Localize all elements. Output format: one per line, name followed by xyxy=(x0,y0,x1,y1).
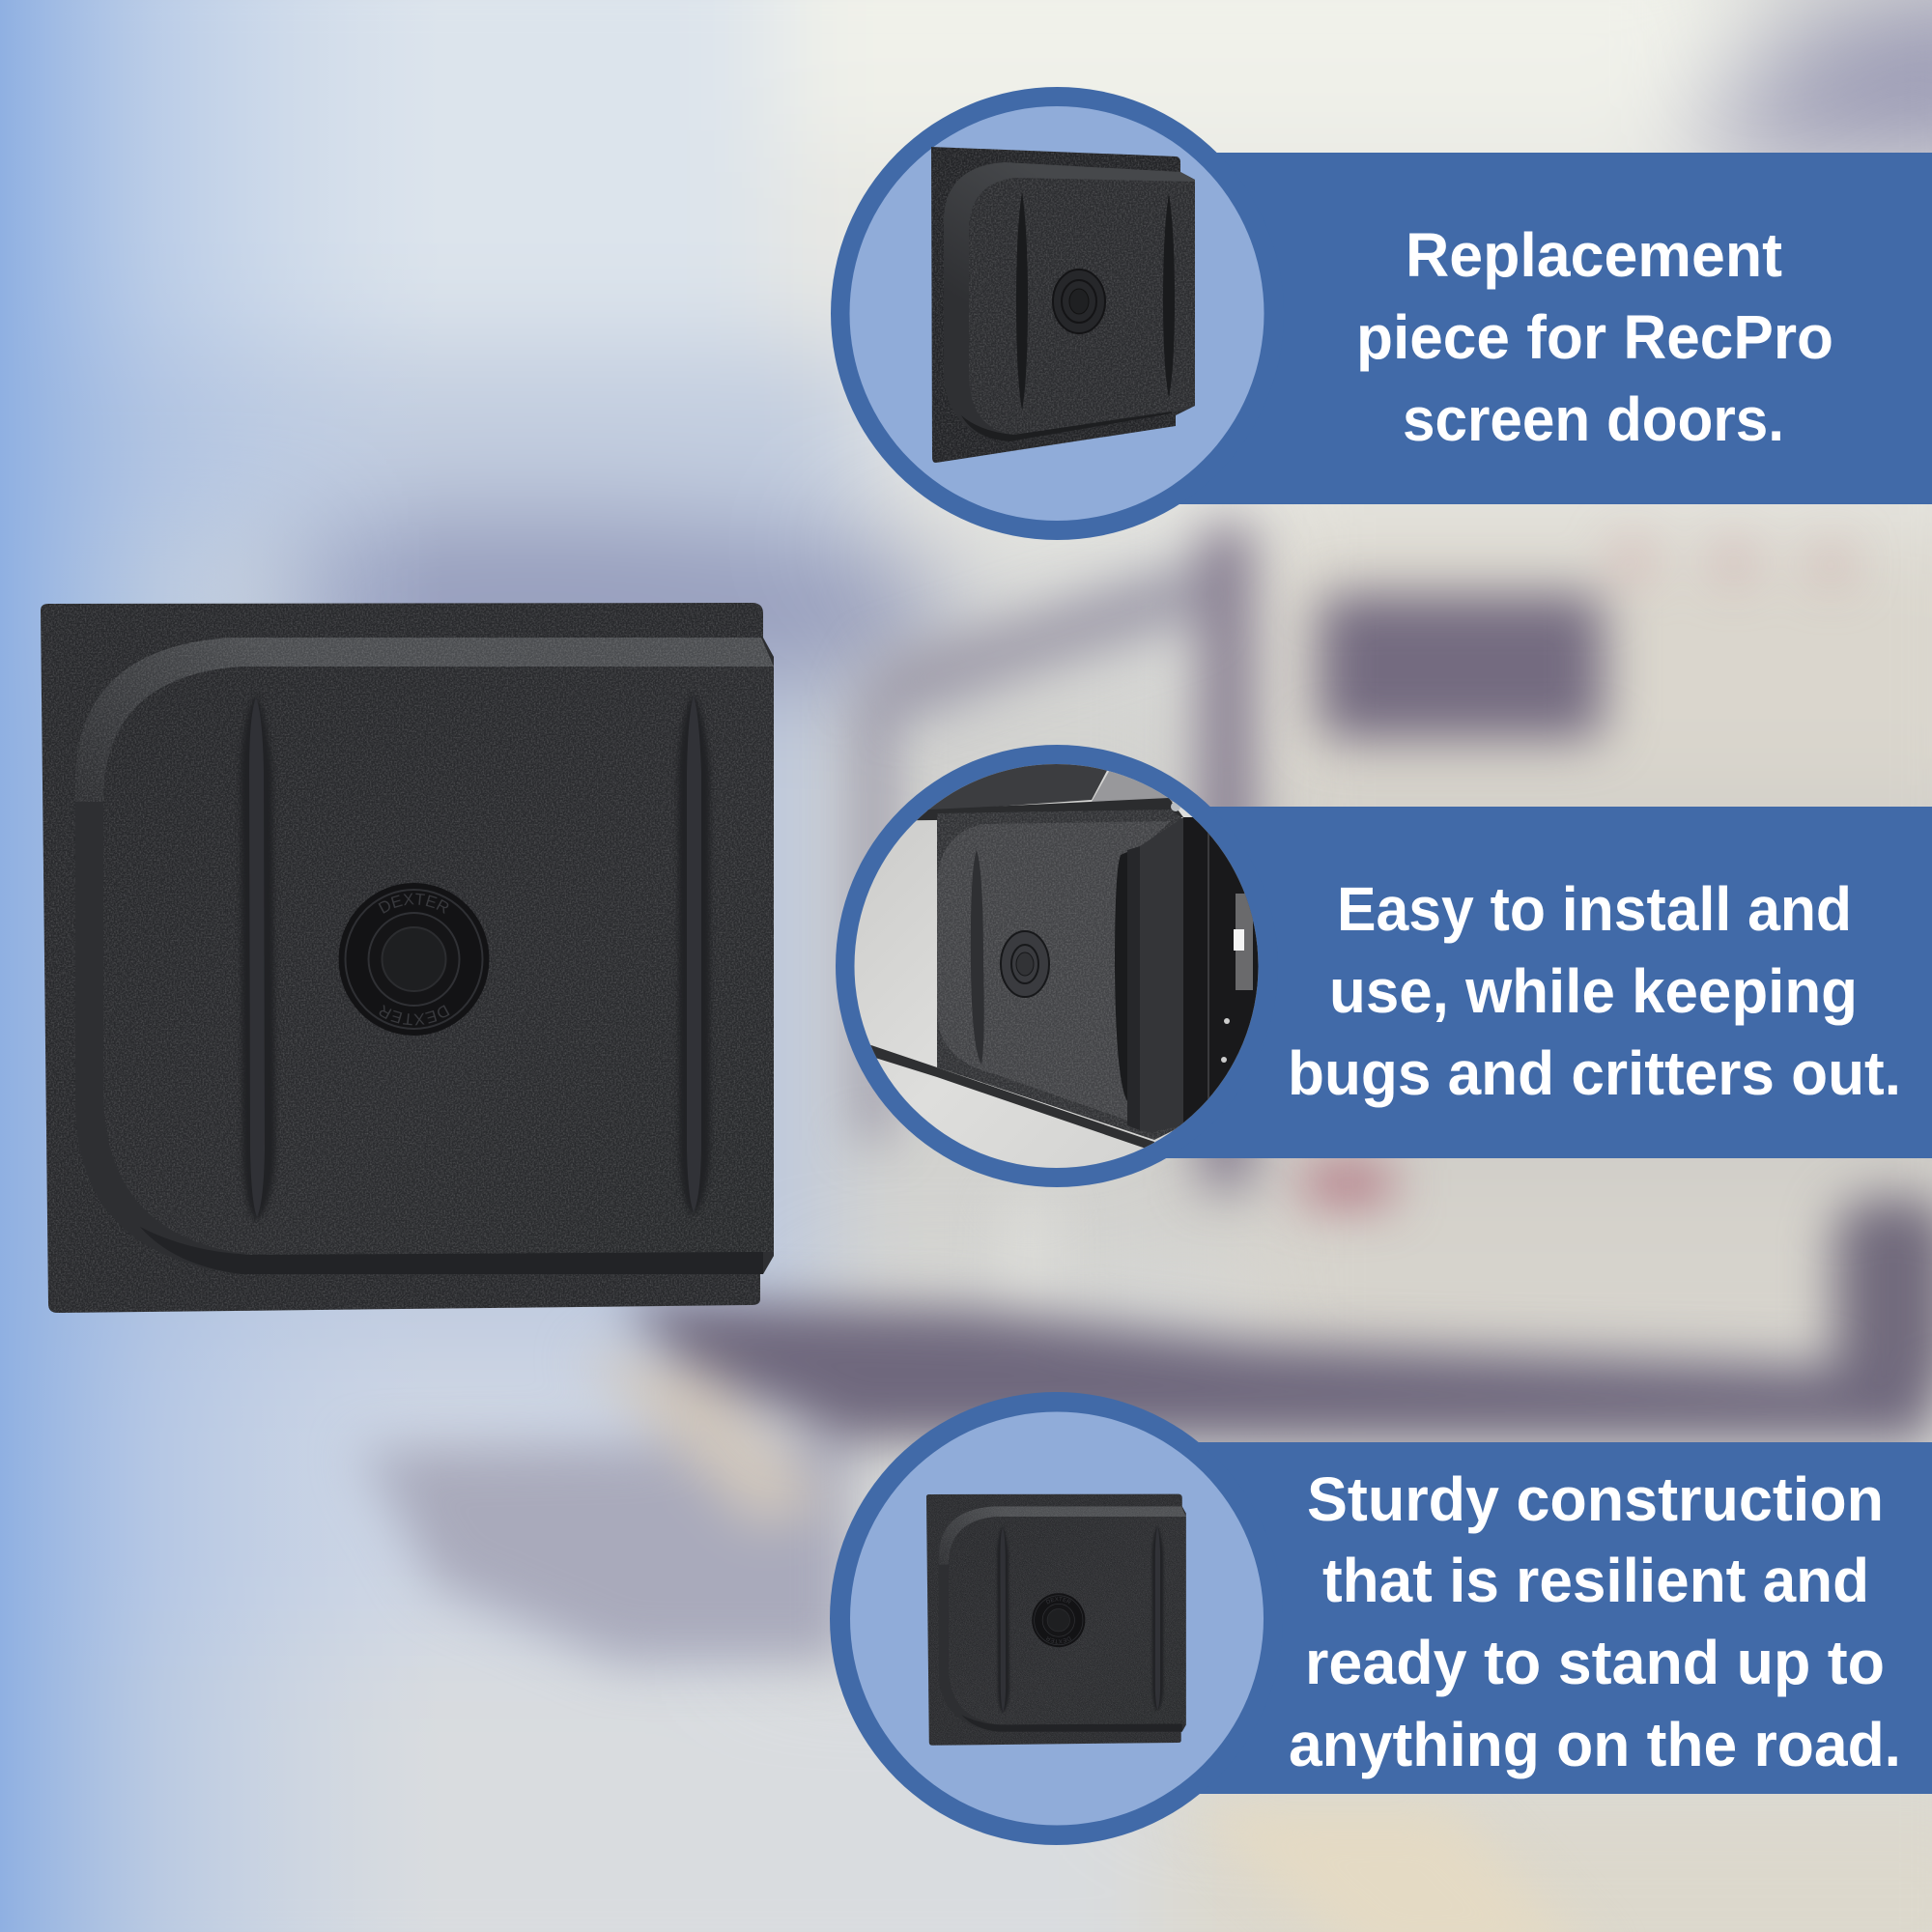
caption 1: Replacement xyxy=(1406,220,1782,290)
feature 2: easy to install xyxy=(836,745,1932,1187)
angled product view xyxy=(931,147,1195,463)
Dexter logo button: DEXTER xyxy=(379,1005,450,1026)
caption 3 xyxy=(1289,1464,1901,1779)
circle frame 3 xyxy=(830,1392,1283,1845)
feature 3: sturdy construction xyxy=(830,1392,1932,1845)
blue banner 3 xyxy=(1057,1442,1932,1794)
circle frame 1 xyxy=(831,87,1284,540)
left rib xyxy=(241,695,275,1221)
caption 3: ready to stand up to xyxy=(1305,1628,1885,1697)
caption 1: piece for RecPro xyxy=(1356,302,1833,372)
caption 1: screen doors. xyxy=(1403,384,1784,454)
caption 3: that is resilient and xyxy=(1322,1546,1869,1615)
Dexter logo button: DEXTER xyxy=(379,893,448,914)
circle fill 3 xyxy=(850,1412,1264,1826)
blue banner 1 xyxy=(1057,153,1932,504)
installed door photo xyxy=(850,758,1265,1174)
base flange xyxy=(41,603,774,1313)
caption 1 xyxy=(1356,220,1833,454)
top bevel highlight xyxy=(75,638,774,802)
caption 2: bugs and critters out. xyxy=(1288,1038,1901,1108)
caption 2: use, while keeping xyxy=(1329,956,1858,1026)
raised D-shaped outer edge xyxy=(75,638,774,1274)
caption 3: Sturdy construction xyxy=(1307,1464,1884,1534)
small front product view xyxy=(926,1494,1186,1746)
lower edge shadow xyxy=(140,1227,763,1274)
caption 2 xyxy=(1288,874,1901,1108)
circle frame 2 xyxy=(836,745,1278,1187)
Dexter logo button xyxy=(338,883,489,1036)
caption 3: anything on the road. xyxy=(1289,1710,1901,1779)
feature 1: replacement piece xyxy=(831,87,1932,540)
raised face xyxy=(103,667,774,1255)
circle fill 1 xyxy=(850,106,1264,521)
blue banner 2 xyxy=(1057,807,1932,1158)
main product photo: Dexter slide-out cover xyxy=(41,603,774,1313)
caption 2: Easy to install and xyxy=(1337,874,1852,944)
right rib xyxy=(678,694,710,1215)
